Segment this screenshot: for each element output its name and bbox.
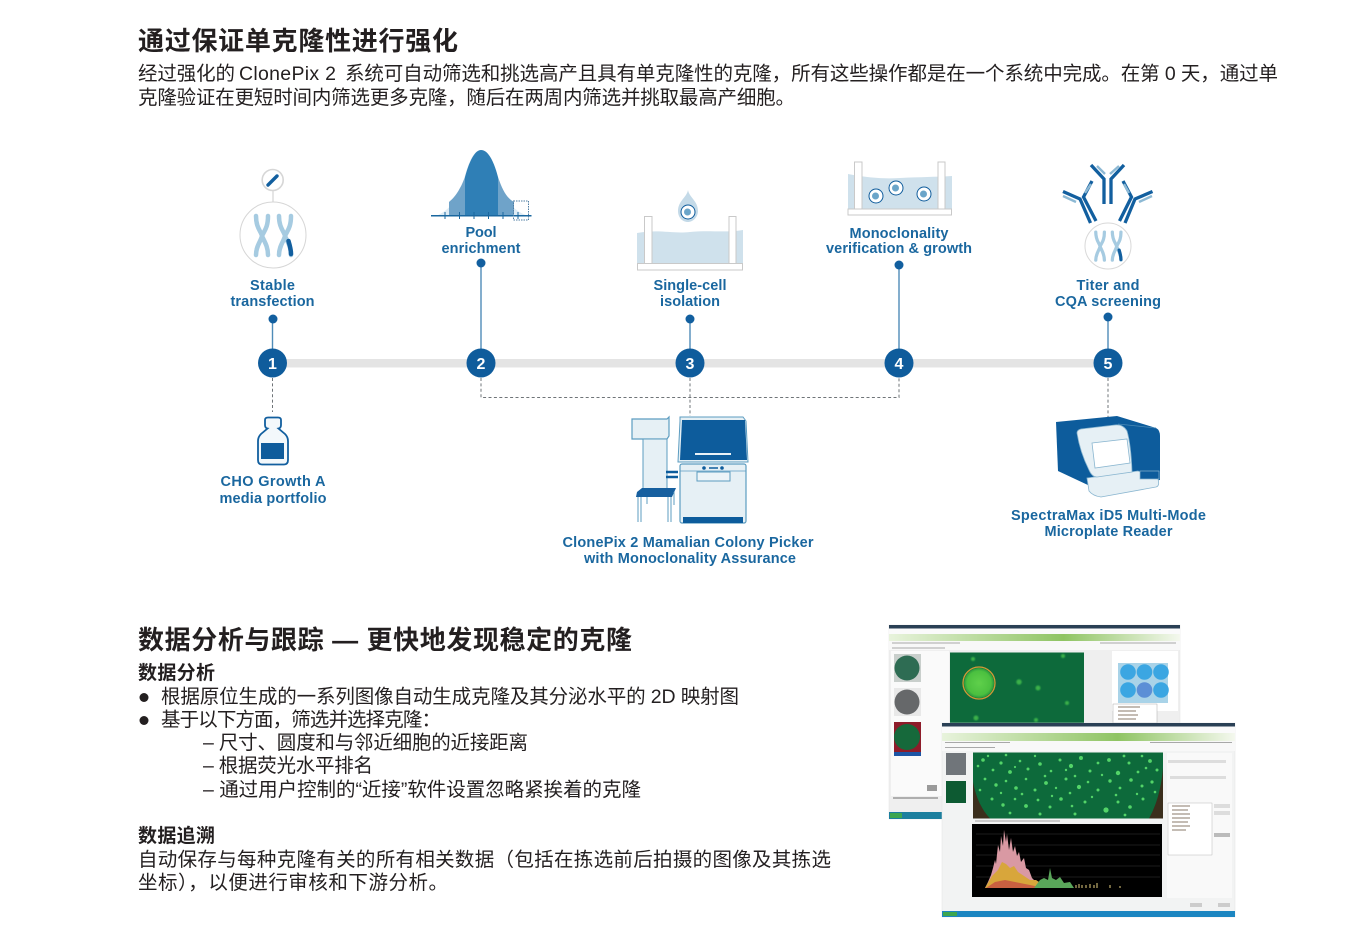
label: monoclonality verification: verification & growth [826,241,972,257]
step number 5 [1094,348,1122,378]
step number 1: 1 [268,356,277,373]
step number 2 [466,348,496,378]
label: CHO Growth A media [220,474,327,507]
step number 3: 3 [686,356,695,373]
icon: media bottle [258,418,288,464]
label: SpectraMax iD5 [1011,508,1206,540]
bullet list: analysis features [140,686,739,801]
label: titer and CQA screening [1055,278,1161,310]
label: ClonePix 2 picker: ClonePix 2 Mamalian Colony Picker [562,535,814,551]
step number 1 [258,348,287,378]
title: monoclonality: 通过保证单克隆性进行强化 [138,26,458,56]
subheading: data analysis: 数据分析 [138,662,215,684]
label: CHO Growth A media: CHO Growth A [220,474,326,490]
icon: pool enrichment bell curve [431,150,532,220]
heading: data analysis and tracking: 数据分析与跟踪 — 更快地发现稳定的克隆 [138,625,632,655]
label: ClonePix 2 picker [562,535,814,567]
bullet list: analysis features: 根据原位生成的一系列图像自动生成克隆及其分泌水平的 2D 映射图 [161,686,739,708]
step number 3 [676,348,704,378]
label: ClonePix 2 picker: with Monoclonality Assurance [583,551,796,567]
label: pool enrichment: enrichment [442,241,521,257]
label: stable transfection: transfection [230,294,314,310]
intro paragraph: 经过强化的 [138,63,235,85]
paragraph: traceability [138,849,831,894]
label: CHO Growth A media: media portfolio [220,491,327,507]
label: pool enrichment: Pool [466,225,496,241]
step number 4 [884,348,914,378]
step number 4: 4 [895,356,904,373]
timeline track [272,359,1108,368]
icon: SpectraMax iD5 reader [1056,416,1160,497]
icon: monoclonality verification plate [848,162,952,215]
label: titer and CQA screening: CQA screening [1055,294,1161,310]
intro paragraph: 克隆验证在更短时间内筛选更多克隆，随后在两周内筛选并挑取最高产细胞。 [138,87,795,109]
intro paragraph: 系统可自动筛选和挑选高产且具有单克隆性的克隆，所有这些操作都是在一个系统中完成。在第 0 天，通过单 [345,63,1278,85]
intro paragraph: ClonePix 2 [239,63,336,85]
screenshot: back software window [889,625,1180,819]
label: titer and CQA screening: Titer and [1076,278,1140,294]
label: single-cell isolation: Single-cell [654,278,726,294]
paragraph: traceability: 自动保存与每种克隆有关的所有相关数据（包括在拣选前后拍摄的图像及其拣选 [138,849,831,871]
bullet list: analysis features: 基于以下方面，筛选并选择克隆： [161,709,441,731]
icon: single-cell isolation plate [637,190,743,270]
icon: stable transfection chromosomes [240,170,306,268]
subheading: data traceability: 数据追溯 [138,824,215,847]
label: stable transfection [230,278,314,310]
label: stable transfection: Stable [250,278,295,294]
icon: ClonePix 2 instrument [632,417,748,523]
connector lines [268,258,1112,417]
label: SpectraMax iD5: Microplate Reader [1044,524,1173,540]
label: single-cell isolation: isolation [660,294,720,310]
step number 5: 5 [1104,356,1113,373]
bullet list: analysis features: – 尺寸、圆度和与邻近细胞的近接距离 [203,732,528,754]
bullet list: analysis features: – 根据荧光水平排名 [203,755,373,777]
screenshot: front software window [942,723,1235,917]
label: single-cell isolation [654,278,726,310]
label: pool enrichment [442,225,521,257]
icon: antibodies and chromosomes [1063,165,1152,269]
intro paragraph [138,63,1278,109]
label: SpectraMax iD5: SpectraMax iD5 Multi-Mode [1011,508,1206,524]
label: monoclonality verification [826,226,972,257]
label: monoclonality verification: Monoclonality [850,226,948,242]
step number 2: 2 [477,356,486,373]
paragraph: traceability: 坐标），以便进行审核和下游分析。 [138,872,448,894]
bullet list: analysis features: – 通过用户控制的“近接”软件设置忽略紧挨着的克隆 [203,779,641,801]
